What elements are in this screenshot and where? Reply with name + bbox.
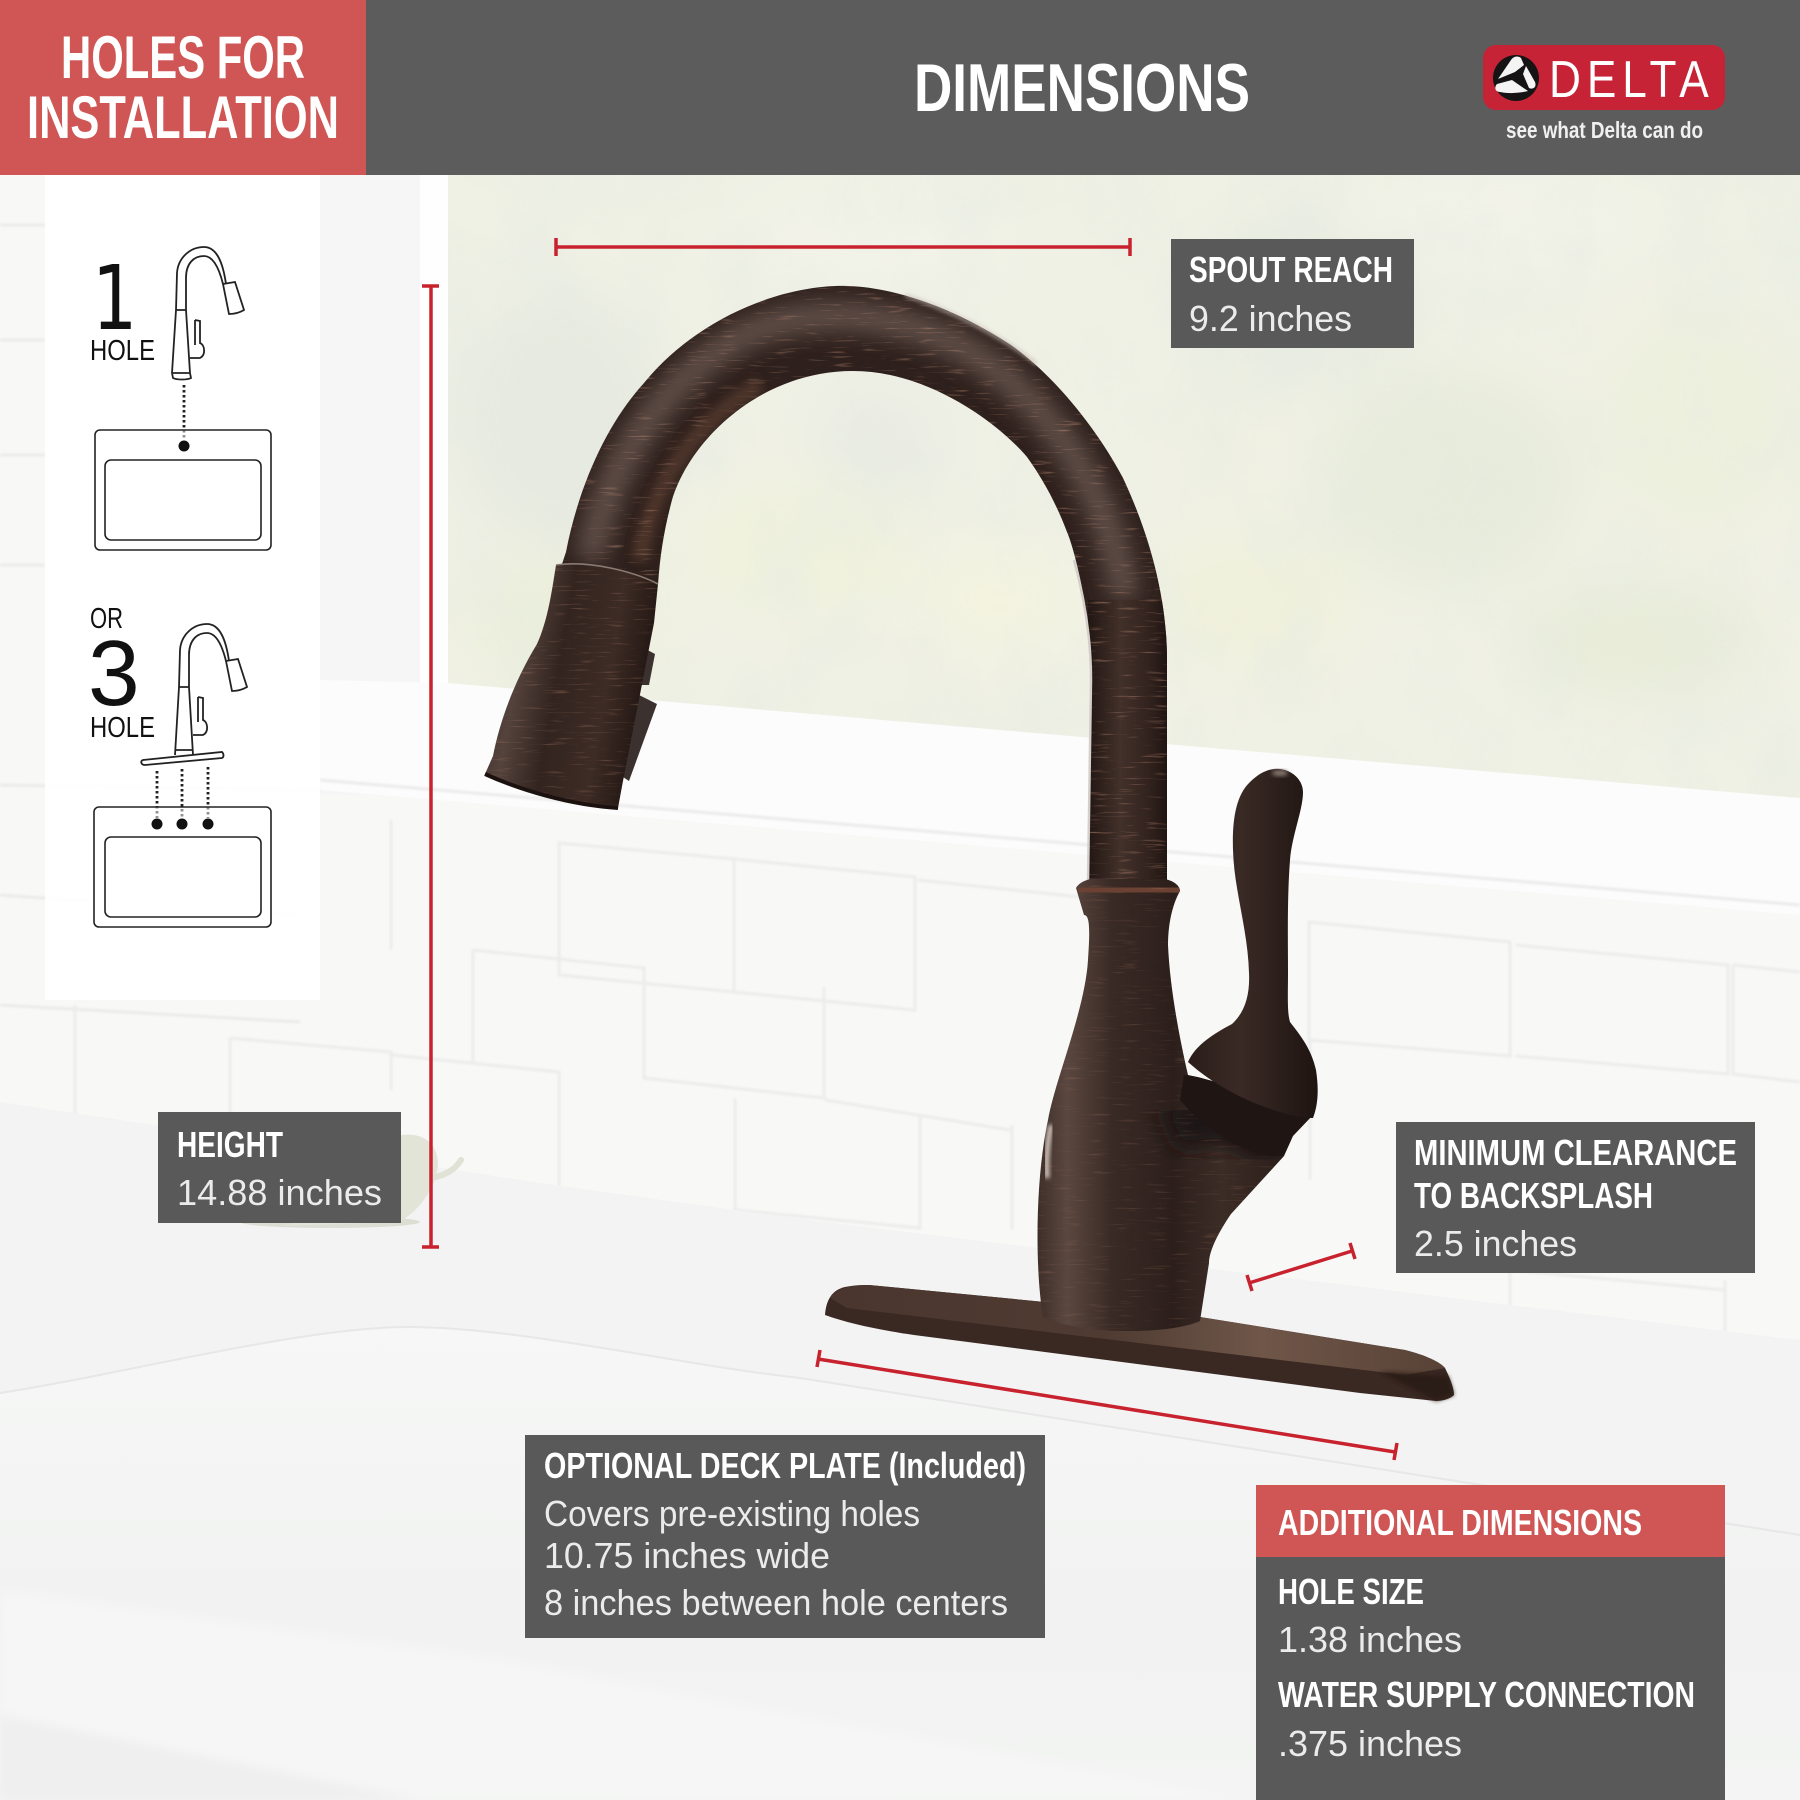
- logo: delta: see what Delta can do: [1506, 117, 1703, 143]
- dotted guides: [157, 767, 208, 818]
- logo: delta: [1483, 45, 1725, 143]
- callout: spout reach: [1171, 239, 1414, 348]
- hole size: HOLE SIZE: [1278, 1571, 1424, 1612]
- title: dimensions: DIMENSIONS: [914, 50, 1250, 126]
- wall tiles: [75, 820, 1800, 1345]
- hole size: 1.38 inches: [1278, 1619, 1462, 1660]
- callout: height: [158, 1112, 401, 1223]
- callout: optional deck plate: Covers pre-existing holes: [544, 1493, 920, 1534]
- callout: minimum clearance: TO BACKSPLASH: [1414, 1175, 1653, 1216]
- white installation panel: [45, 175, 320, 1000]
- callout: optional deck plate: 10.75 inches wide: [544, 1535, 830, 1576]
- icon: sink with one hole: [95, 430, 271, 550]
- faucet body: [1035, 879, 1295, 1331]
- header bar: [0, 0, 1800, 175]
- heading: holes for installation: INSTALLATION: [27, 84, 339, 151]
- pepper behind height box: [240, 1135, 461, 1228]
- numeral 3: 3: [88, 621, 140, 725]
- heading: holes for installation: [27, 24, 339, 151]
- water supply connection: [1278, 1674, 1695, 1764]
- dotted guide: [183, 385, 185, 440]
- panel heading: [1256, 1485, 1725, 1557]
- background: countertop and sink: [0, 1102, 1800, 1800]
- icon: one-hole faucet: [172, 247, 244, 380]
- water supply connection: .375 inches: [1278, 1723, 1462, 1764]
- water supply connection: WATER SUPPLY CONNECTION: [1278, 1674, 1695, 1715]
- background: window with blurred trees: [448, 170, 1800, 815]
- callout: optional deck plate: OPTIONAL DECK PLATE (Included): [544, 1445, 1026, 1486]
- callout: minimum clearance: [1396, 1122, 1755, 1273]
- hole size: [1278, 1571, 1462, 1660]
- spout: [560, 280, 1180, 890]
- dimension line: clearance: [1247, 1243, 1355, 1291]
- logo: delta: DELTA: [1549, 51, 1715, 109]
- callout: height: HEIGHT: [177, 1124, 283, 1165]
- icon group: 3 hole: [88, 603, 271, 927]
- numeral 1: 1: [92, 247, 137, 351]
- label: or: OR: [90, 603, 123, 635]
- pull-down wand: [480, 560, 665, 810]
- header red block: [0, 0, 366, 175]
- label: hole: HOLE: [90, 712, 155, 744]
- icon: three-hole faucet with plate: [141, 624, 247, 765]
- heading: holes for installation: HOLES FOR: [61, 24, 305, 91]
- dimension line: height: [422, 286, 439, 1247]
- callout: minimum clearance: 2.5 inches: [1414, 1223, 1577, 1264]
- dimension line: spout reach: [556, 238, 1130, 256]
- faucet: [480, 280, 1454, 1401]
- label: hole: HOLE: [90, 335, 155, 367]
- deck plate: [825, 1285, 1454, 1401]
- callout: height: 14.88 inches: [177, 1172, 382, 1213]
- icon group: 1 hole: [90, 247, 271, 550]
- callout: spout reach: SPOUT REACH: [1189, 249, 1393, 290]
- window sill: [320, 680, 1800, 915]
- callout: spout reach: 9.2 inches: [1189, 298, 1352, 339]
- dimension line: deck plate: [817, 1350, 1397, 1460]
- panel heading: ADDITIONAL DIMENSIONS: [1278, 1502, 1642, 1543]
- icon: sink with three holes: [94, 807, 271, 927]
- callout: optional deck plate: [525, 1435, 1045, 1638]
- faucet lever: [1180, 769, 1318, 1156]
- callout: optional deck plate: 8 inches between hole centers: [544, 1582, 1008, 1623]
- panel: additional dimensions: [1256, 1485, 1725, 1800]
